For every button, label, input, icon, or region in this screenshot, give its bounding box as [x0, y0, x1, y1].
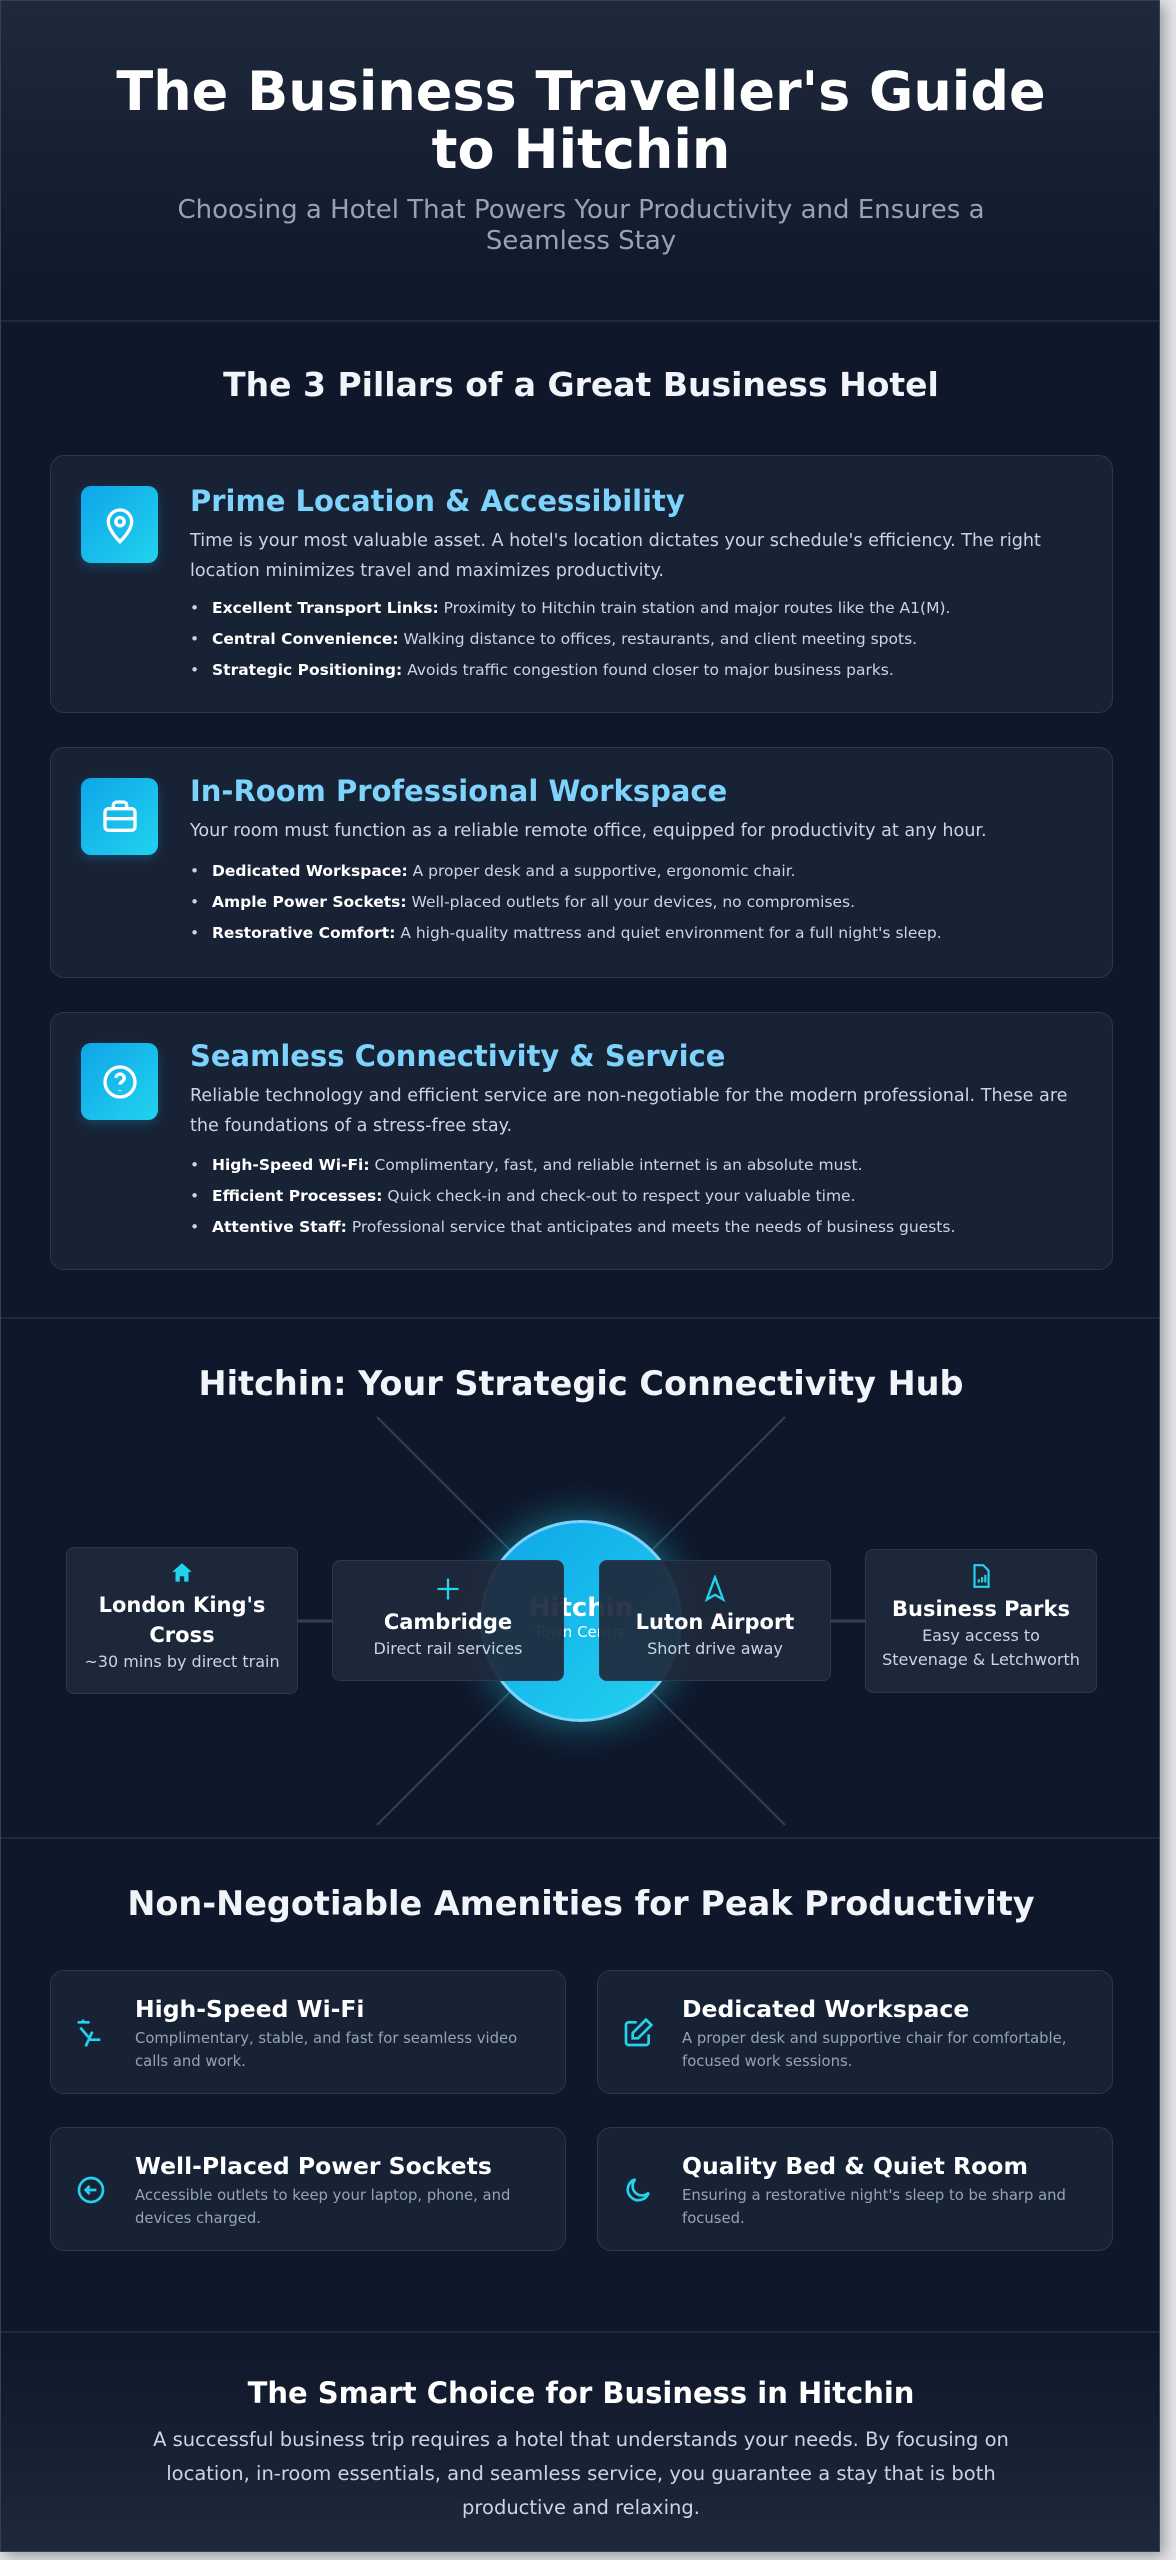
card text: Time is your most valuable asset. A hotel's location dictates your schedule's efficiency. The right location minimizes travel and maximizes productivity.: [190, 531, 1041, 581]
connector lines: [298, 1416, 865, 1826]
bullet list: Dedicated Workspace: A proper desk and a supportive, ergonomic chair.: [212, 862, 796, 880]
node: luton: [599, 1560, 831, 1681]
panel: workspace: [50, 747, 1113, 978]
card title: Prime Location & Accessibility: [190, 484, 685, 518]
header: [1, 1, 1161, 321]
subtitle: Choosing a Hotel That Powers Your Productivity and Ensures a Seamless Stay: [177, 195, 985, 256]
bullet list: Excellent Transport Links: Proximity to Hitchin train station and major routes like the A1(M).: [212, 599, 950, 617]
bullet list: High-Speed Wi-Fi: Complimentary, fast, and reliable internet is an absolute must.: [212, 1156, 862, 1174]
heading: hub: Hitchin: Your Strategic Connectivity Hub: [199, 1364, 963, 1403]
amenity: sockets: Well-Placed Power Sockets: [135, 2152, 492, 2180]
amenity: wifi: Complimentary, stable, and fast for seamless video calls and work.: [135, 2030, 517, 2070]
footer text: A successful business trip requires a hotel that understands your needs. By focusing on location, in-room essentials, and seamless service, you guarantee a stay that is both productive and relaxing.: [153, 2428, 1009, 2519]
node: cambridge: [332, 1560, 564, 1681]
card text: Your room must function as a reliable remote office, equipped for productivity at any hour.: [190, 821, 987, 841]
bullet list: Restorative Comfort: A high-quality mattress and quiet environment for a full night's sleep.: [212, 924, 942, 942]
amenity: sockets: Accessible outlets to keep your laptop, phone, and devices charged.: [135, 2187, 510, 2227]
amenity: workspace: [597, 1970, 1113, 2094]
node: london: London King's Cross: [99, 1593, 265, 1647]
hub circle: Town Centre: [535, 1623, 627, 1641]
hub circle: Hitchin: [529, 1593, 633, 1623]
hub circle: [480, 1520, 682, 1722]
card text: Reliable technology and efficient service are non-negotiable for the modern professional. These are the foundations of a stress-free stay.: [190, 1086, 1068, 1136]
heading: pillars: The 3 Pillars of a Great Business Hotel: [223, 365, 939, 404]
bullet list: Strategic Positioning: Avoids traffic congestion found closer to major business parks.: [212, 661, 894, 679]
amenity: wifi: [50, 1970, 566, 2094]
amenity: bed: Quality Bed & Quiet Room: [682, 2152, 1028, 2180]
heading: amenities: Non-Negotiable Amenities for Peak Productivity: [127, 1884, 1035, 1923]
node: luton: Short drive away: [647, 1639, 783, 1658]
bullet list: [192, 599, 950, 679]
footer: [1, 2331, 1161, 2553]
amenity: workspace: Dedicated Workspace: [682, 1995, 969, 2023]
bullet list: Central Convenience: Walking distance to offices, restaurants, and client meeting spots.: [212, 630, 917, 648]
node: cambridge: Direct rail services: [374, 1639, 522, 1658]
card title: Seamless Connectivity & Service: [190, 1039, 725, 1073]
node: business parks: Easy access to: [922, 1626, 1040, 1645]
amenity: sockets: [50, 2127, 566, 2251]
icon: location pin: [81, 486, 158, 563]
icon: help circle: [81, 1043, 158, 1120]
card title: In-Room Professional Workspace: [190, 774, 727, 808]
bullet list: Attentive Staff: Professional service that anticipates and meets the needs of business guests.: [212, 1218, 955, 1236]
amenity: bed: Ensuring a restorative night's sleep to be sharp and focused.: [682, 2187, 1066, 2227]
bullet list: [192, 862, 942, 942]
icon: briefcase: [81, 778, 158, 855]
title: The Business Traveller's Guide to Hitchin: [116, 60, 1046, 181]
node: cambridge: Cambridge: [384, 1610, 512, 1634]
panel: prime location: [50, 455, 1113, 713]
amenity: wifi: High-Speed Wi-Fi: [135, 1995, 364, 2023]
bullet list: Ample Power Sockets: Well-placed outlets for all your devices, no compromises.: [212, 893, 855, 911]
node: business parks: [865, 1549, 1097, 1693]
panel: connectivity: [50, 1012, 1113, 1270]
footer title: The Smart Choice for Business in Hitchin: [248, 2376, 914, 2410]
node: business parks: Business Parks: [892, 1597, 1070, 1621]
node: london: [66, 1547, 298, 1694]
bullet list: Efficient Processes: Quick check-in and check-out to respect your valuable time.: [212, 1187, 856, 1205]
node: london: ~30 mins by direct train: [84, 1652, 280, 1671]
node: business parks: Stevenage & Letchworth: [882, 1650, 1080, 1669]
hub diagram: [66, 1416, 1097, 1826]
bullet list: [192, 1156, 955, 1236]
node: luton: Luton Airport: [636, 1610, 794, 1634]
amenity: workspace: A proper desk and supportive chair for comfortable, focused work sessions.: [682, 2030, 1066, 2070]
amenity: bed: [597, 2127, 1113, 2251]
